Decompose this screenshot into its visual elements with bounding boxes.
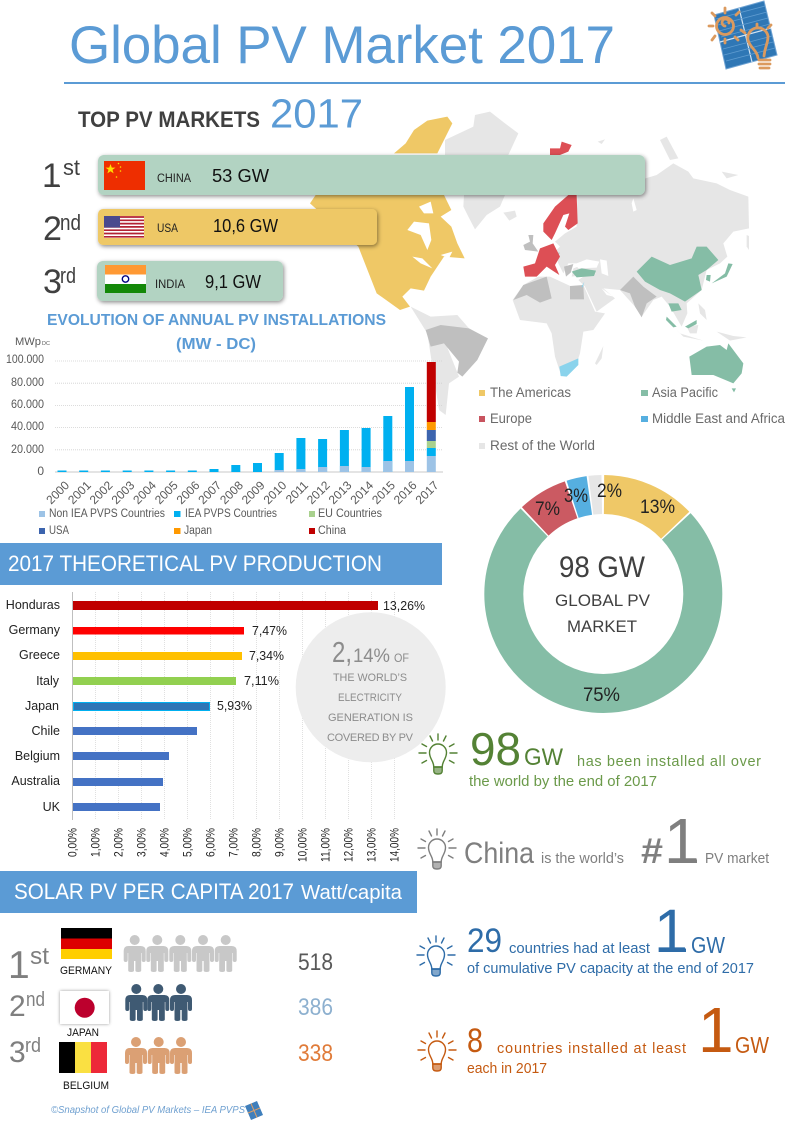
map: Americas bbox=[310, 117, 488, 415]
bars bbox=[73, 601, 378, 811]
callout circle: 2,14%: OF bbox=[394, 651, 409, 665]
per capita row: Japan: nd bbox=[26, 989, 45, 1011]
icon: grey bulb bbox=[418, 829, 456, 869]
title: Global PV Market 2017 bbox=[69, 16, 615, 75]
stat: 8 countries: 1 bbox=[698, 994, 734, 1066]
per capita row: Japan bbox=[9, 984, 333, 1039]
per capita row: Japan: 386 bbox=[298, 994, 333, 1021]
value labels: 7,11% bbox=[244, 674, 279, 688]
stat: 29 countries bbox=[417, 897, 754, 977]
header: theoretical PV production: 2017 THEORETICAL PV PRODUCTION bbox=[8, 551, 382, 576]
map: inland seas bbox=[575, 198, 637, 297]
donut percentages: 7% bbox=[535, 499, 560, 520]
stat: 8 countries: 8 bbox=[467, 1022, 483, 1060]
country labels: Germany bbox=[9, 623, 61, 637]
rank row: India: 3 bbox=[43, 263, 62, 301]
stat: 98 GW: GW bbox=[524, 744, 563, 771]
header: theoretical PV production bbox=[0, 543, 442, 585]
per capita row: Germany: 1 bbox=[8, 944, 30, 987]
heading: top PV markets: 2017 bbox=[270, 90, 363, 136]
world map bbox=[310, 112, 749, 415]
chart legend: China bbox=[318, 525, 347, 537]
icon: five grey people bbox=[124, 935, 237, 972]
map: rest of the world bbox=[445, 112, 749, 377]
map: South America bbox=[411, 307, 469, 415]
country labels bbox=[6, 598, 61, 814]
flag: China bbox=[104, 161, 145, 190]
value labels bbox=[217, 599, 425, 713]
rank row: India: rd bbox=[60, 263, 76, 288]
x axis labels bbox=[68, 828, 402, 862]
header: solar PV per capita bbox=[0, 871, 417, 913]
rank row: India: INDIA bbox=[155, 279, 185, 291]
callout circle: 2,14%: COVERED BY PV bbox=[327, 732, 414, 744]
chart legend: USA bbox=[49, 525, 69, 537]
footer credit: ©Snapshot of Global PV Markets – IEA PVPS bbox=[51, 1104, 245, 1116]
country labels: Honduras bbox=[6, 598, 60, 612]
year labels bbox=[43, 478, 442, 507]
rank row: India bbox=[43, 261, 283, 301]
year labels: 2012 bbox=[304, 478, 333, 507]
x axis labels: 6,00% bbox=[206, 828, 218, 857]
year labels: 2004 bbox=[130, 478, 159, 507]
stat: 8 countries: GW bbox=[735, 1032, 769, 1058]
map: Hudson bay and lakes bbox=[407, 202, 452, 268]
stat: 98 GW: has been installed all over bbox=[577, 754, 761, 770]
y axis labels: 0 bbox=[37, 464, 44, 478]
x axis labels: 0,00% bbox=[68, 828, 80, 857]
chart legend: EU Countries bbox=[318, 508, 382, 520]
stat: China #1: is the world’s bbox=[541, 851, 624, 867]
year labels: 2007 bbox=[195, 478, 224, 507]
map legend: Middle East and Africa bbox=[652, 411, 785, 426]
stat: 29 countries: of cumulative PV capacity at the end of 2017 bbox=[467, 961, 754, 977]
icon: orange bulb bbox=[418, 1031, 456, 1071]
value labels: 7,34% bbox=[249, 649, 284, 663]
year labels: 2006 bbox=[174, 478, 203, 507]
country labels: Japan bbox=[25, 699, 59, 713]
chart title: (MW - DC) bbox=[176, 336, 256, 353]
rank row: China: 1 bbox=[42, 157, 61, 195]
map: Europe red bbox=[523, 142, 578, 277]
stat: 29 countries: 1 bbox=[654, 897, 688, 965]
flag: USA bbox=[104, 216, 144, 238]
map: old world bbox=[445, 112, 749, 392]
per capita row: Belgium: 3 bbox=[9, 1036, 26, 1069]
x axis labels: 5,00% bbox=[182, 828, 194, 857]
stat: 98 GW: 98 bbox=[470, 723, 521, 775]
map legend: Europe bbox=[490, 411, 532, 426]
rank row: USA: nd bbox=[60, 210, 81, 235]
per capita row: Japan: 2 bbox=[9, 990, 26, 1023]
stat: China #1: PV market bbox=[705, 851, 769, 867]
stat: 98 GW bbox=[419, 723, 761, 790]
flag: Belgium bbox=[59, 1042, 107, 1073]
rank row: China: 53 GW bbox=[212, 166, 269, 186]
donut centre text: GLOBAL PV bbox=[555, 591, 651, 610]
map: Middle East and Africa blue bbox=[559, 282, 584, 377]
value labels: 7,47% bbox=[252, 624, 287, 638]
chart legend bbox=[39, 508, 382, 537]
stacked bar chart: annual PV installations bbox=[6, 336, 443, 507]
x axis labels: 3,00% bbox=[136, 828, 148, 857]
map legend: Asia Pacific bbox=[652, 385, 718, 400]
donut centre text: 98 GW bbox=[559, 551, 646, 584]
donut centre text bbox=[555, 551, 651, 636]
value labels: 5,93% bbox=[217, 699, 252, 713]
donut centre text: MARKET bbox=[567, 617, 637, 636]
x axis labels: 9,00% bbox=[274, 828, 286, 857]
chart legend: IEA PVPS Countries bbox=[185, 508, 277, 520]
per capita row: Germany: st bbox=[30, 943, 49, 970]
header: solar PV per capita: SOLAR PV PER CAPITA 2017 bbox=[14, 879, 294, 904]
x axis labels: 14,00% bbox=[390, 828, 402, 862]
stat: 29 countries: countries had at least bbox=[509, 941, 650, 957]
IEA PVPS bars bbox=[58, 387, 436, 472]
year labels: 2011 bbox=[283, 478, 311, 506]
country labels: Chile bbox=[32, 724, 60, 738]
year labels: 2013 bbox=[326, 478, 355, 507]
icon: three navy people bbox=[125, 984, 192, 1021]
stat: 8 countries: countries installed at least bbox=[497, 1041, 686, 1057]
stat: 29 countries: GW bbox=[691, 932, 725, 958]
stat: 29 countries: 29 bbox=[467, 922, 502, 960]
year labels: 2008 bbox=[217, 478, 246, 507]
y axis labels: 80.000 bbox=[11, 375, 44, 389]
year labels: 2003 bbox=[109, 478, 138, 507]
callout circle: 2,14%: ELECTRICITY bbox=[338, 692, 403, 704]
flag: India bbox=[105, 265, 146, 293]
heading: top PV markets bbox=[78, 90, 363, 136]
country labels: Italy bbox=[36, 674, 60, 688]
y axis labels: MWp bbox=[15, 336, 41, 348]
per capita row: Belgium: 338 bbox=[298, 1040, 333, 1067]
x axis labels: 4,00% bbox=[160, 828, 172, 857]
stat: 8 countries: each in 2017 bbox=[467, 1061, 547, 1077]
y axis labels: 60.000 bbox=[11, 397, 44, 411]
icon: green bulb bbox=[419, 734, 457, 774]
chart legend: Non IEA PVPS Countries bbox=[49, 508, 165, 520]
y axis labels: DC bbox=[42, 341, 50, 347]
y axis labels: 20.000 bbox=[11, 442, 44, 456]
year labels: 2001 bbox=[65, 478, 94, 507]
callout circle: 2,14%: GENERATION IS bbox=[328, 712, 413, 724]
country labels: Greece bbox=[19, 648, 60, 662]
flag: Japan bbox=[60, 991, 109, 1024]
year labels: 2002 bbox=[87, 478, 116, 507]
y axis labels bbox=[6, 336, 50, 478]
icon: three orange people bbox=[125, 1037, 192, 1074]
heading: top PV markets: TOP PV MARKETS bbox=[78, 107, 260, 132]
year labels: 2010 bbox=[261, 478, 290, 507]
x axis labels: 1,00% bbox=[90, 828, 102, 857]
year labels: 2016 bbox=[391, 478, 420, 507]
stat: China #1: 1 bbox=[664, 805, 700, 877]
logo: solar panel with sun and bulb bbox=[709, 1, 777, 69]
donut percentages: 2% bbox=[597, 481, 622, 502]
per capita row: Germany: GERMANY bbox=[60, 965, 113, 977]
year labels: 2015 bbox=[369, 478, 398, 507]
map: Brazil and neighbours dark bbox=[426, 325, 488, 377]
2017 stack segments bbox=[427, 362, 436, 448]
chart legend: Japan bbox=[184, 525, 212, 537]
year labels: 2009 bbox=[239, 478, 268, 507]
title rule bbox=[64, 82, 785, 84]
y axis labels: 100.000 bbox=[6, 352, 44, 366]
year labels: 2014 bbox=[347, 478, 376, 507]
rank row: USA: 10,6 GW bbox=[213, 216, 278, 236]
per capita row: Germany: 518 bbox=[298, 949, 333, 976]
footer logo bbox=[245, 1101, 263, 1120]
rank row: USA: 2 bbox=[43, 210, 62, 248]
callout circle: 2,14% bbox=[296, 612, 446, 762]
per capita row: Belgium: BELGIUM bbox=[63, 1080, 109, 1092]
non-IEA bars bbox=[275, 456, 436, 472]
donut chart: global PV market bbox=[504, 481, 703, 706]
donut percentages bbox=[535, 481, 675, 706]
horizontal bar chart: PV production bbox=[6, 592, 425, 862]
x axis labels: 12,00% bbox=[344, 828, 356, 862]
map legend: Rest of the World bbox=[490, 438, 595, 453]
per capita row: Japan: JAPAN bbox=[67, 1027, 99, 1039]
rank row: China: st bbox=[63, 155, 80, 180]
flag: Germany bbox=[61, 928, 112, 959]
callout circle: 2,14%: THE WORLD’S bbox=[333, 672, 407, 684]
stat: China #1: China bbox=[464, 837, 534, 870]
rank row: India: 9,1 GW bbox=[205, 272, 261, 292]
stat: 98 GW: the world by the end of 2017 bbox=[469, 774, 657, 790]
x axis labels: 10,00% bbox=[298, 828, 310, 862]
map: Asia Pacific green bbox=[572, 247, 743, 392]
y axis labels: 40.000 bbox=[11, 419, 44, 433]
stat: China #1: # bbox=[641, 832, 663, 871]
x axis labels: 7,00% bbox=[228, 828, 240, 857]
rank row: USA bbox=[43, 209, 377, 248]
per capita row: Germany bbox=[8, 928, 333, 987]
stat: 8 countries bbox=[418, 994, 769, 1077]
x axis labels: 13,00% bbox=[366, 828, 378, 862]
map legend: The Americas bbox=[490, 385, 571, 400]
year labels: 2017 bbox=[413, 478, 442, 507]
donut percentages: 3% bbox=[564, 486, 588, 507]
x axis labels: 11,00% bbox=[320, 828, 332, 862]
donut percentages: 13% bbox=[640, 497, 675, 518]
donut percentages: 75% bbox=[583, 685, 620, 706]
icon: blue bulb bbox=[417, 936, 455, 976]
stat: China #1 bbox=[418, 805, 769, 877]
country labels: Belgium bbox=[15, 749, 60, 763]
x axis labels: 8,00% bbox=[252, 828, 264, 857]
map: darker grey countries bbox=[513, 235, 657, 317]
country labels: UK bbox=[43, 800, 61, 814]
x axis labels: 2,00% bbox=[114, 828, 126, 857]
year labels: 2005 bbox=[152, 478, 181, 507]
country labels: Australia bbox=[11, 774, 60, 788]
year labels: 2000 bbox=[43, 478, 72, 507]
value labels: 13,26% bbox=[383, 599, 425, 613]
per capita row: Belgium: rd bbox=[25, 1035, 41, 1057]
map legend bbox=[479, 385, 785, 453]
rank row: China: CHINA bbox=[157, 173, 191, 185]
header: solar PV per capita: Watt/capita bbox=[301, 882, 403, 904]
rank row: USA: USA bbox=[157, 223, 178, 235]
chart title bbox=[47, 312, 386, 353]
map: North America yellow bbox=[310, 117, 465, 310]
chart title: EVOLUTION OF ANNUAL PV INSTALLATIONS bbox=[47, 312, 386, 329]
callout circle: 2,14%: 2, bbox=[332, 637, 352, 669]
per capita row: Belgium bbox=[9, 1035, 333, 1092]
callout circle: 2,14%: 14% bbox=[353, 646, 390, 667]
rank row: China bbox=[42, 155, 645, 195]
